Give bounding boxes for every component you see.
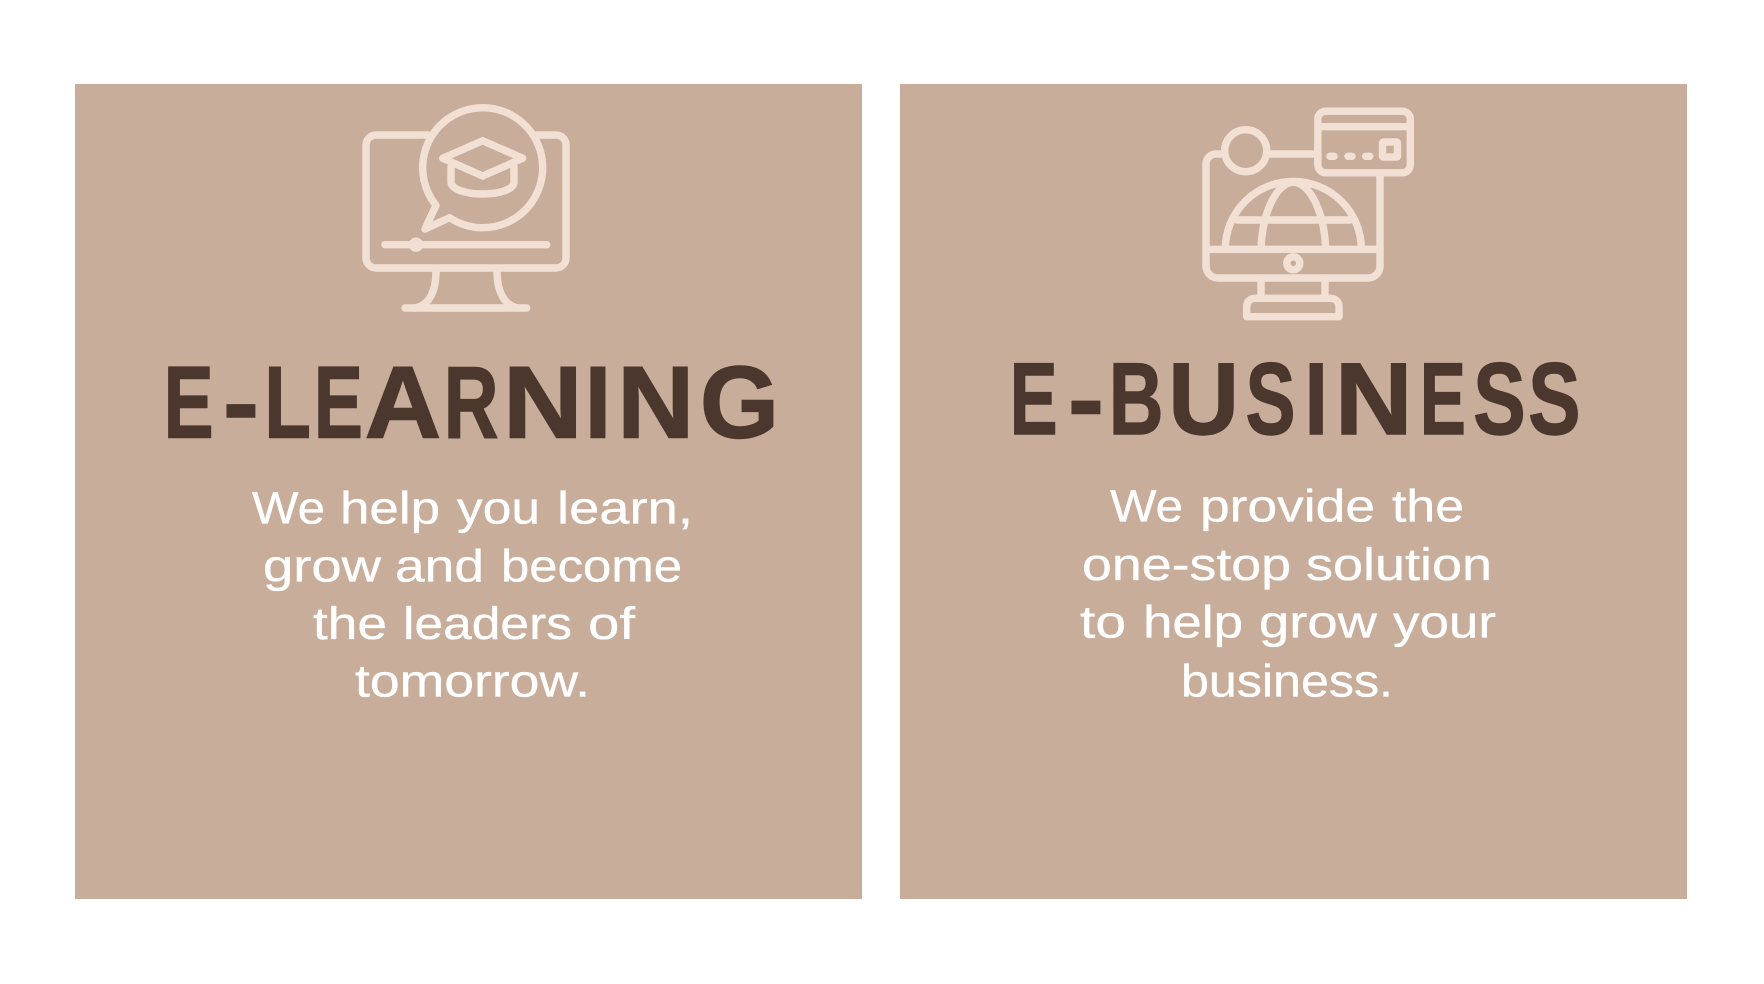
body text: e-learning: help bbox=[340, 482, 440, 533]
body text: e-learning bbox=[252, 482, 693, 707]
body text: e-business: one-stop bbox=[1082, 539, 1291, 590]
body text: e-learning: We bbox=[252, 482, 325, 533]
icon: globe monitor with credit card bbox=[1206, 111, 1410, 317]
heading: e-learning: G bbox=[700, 345, 779, 459]
heading: e-business: E bbox=[1420, 342, 1466, 456]
body text: e-business: provide bbox=[1200, 481, 1375, 532]
body text: e-business: solution bbox=[1306, 539, 1492, 590]
heading: e-learning: N bbox=[617, 345, 694, 459]
body text: e-business bbox=[1080, 481, 1496, 707]
heading: e-business: S bbox=[1246, 342, 1295, 456]
panel background: e-learning bbox=[75, 84, 862, 899]
heading: e-learning: L bbox=[264, 345, 311, 459]
body text: e-learning: learn, bbox=[557, 482, 693, 533]
body text: e-learning: you bbox=[457, 482, 540, 533]
heading: e-learning: A bbox=[365, 345, 441, 459]
panel background: e-business bbox=[900, 84, 1687, 899]
heading: e-business: U bbox=[1168, 342, 1239, 456]
heading: e-learning: R bbox=[444, 345, 498, 459]
heading: e-business: - bbox=[1068, 342, 1104, 456]
body text: e-learning: grow bbox=[263, 541, 382, 592]
body text: e-learning: the bbox=[313, 598, 387, 649]
heading: e-business: B bbox=[1109, 342, 1164, 456]
body text: e-business: the bbox=[1392, 481, 1464, 532]
body text: e-learning: leaders bbox=[403, 598, 572, 649]
icon: monitor with graduation cap speech bubble bbox=[366, 108, 566, 308]
body text: e-business: grow bbox=[1259, 597, 1378, 648]
body text: e-business: business. bbox=[1181, 656, 1393, 707]
body text: e-business: We bbox=[1110, 481, 1183, 532]
heading: e-learning: - bbox=[223, 345, 259, 459]
body text: e-business: help bbox=[1143, 597, 1243, 648]
panel: e-learning bbox=[75, 84, 862, 899]
heading: e-learning: N bbox=[503, 345, 583, 459]
body text: e-learning: tomorrow. bbox=[355, 656, 590, 707]
heading: e-business: I bbox=[1304, 342, 1328, 456]
heading: e-learning: E bbox=[164, 345, 214, 459]
body text: e-learning: and bbox=[395, 541, 484, 592]
heading: e-business: E bbox=[1010, 342, 1058, 456]
heading: e-business: S bbox=[1473, 342, 1526, 456]
body text: e-business: to bbox=[1080, 597, 1126, 648]
heading: e-learning: I bbox=[585, 345, 611, 459]
body text: e-learning: of bbox=[588, 598, 636, 649]
body text: e-business: your bbox=[1393, 597, 1496, 648]
panel: e-business bbox=[900, 84, 1687, 899]
body text: e-learning: become bbox=[501, 541, 682, 592]
heading: e-business: S bbox=[1528, 342, 1580, 456]
heading: e-learning: E bbox=[314, 345, 363, 459]
heading: e-business: N bbox=[1335, 342, 1413, 456]
